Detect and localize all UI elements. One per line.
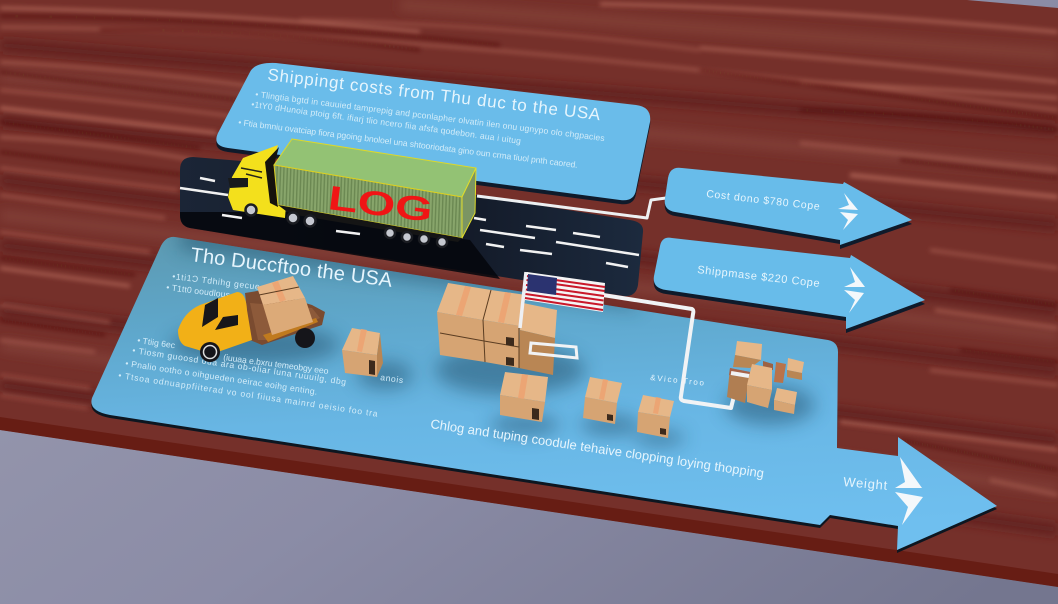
truck with LOG container <box>228 139 476 247</box>
text block: shipping costs bullets <box>238 89 605 170</box>
text block: lower bullets: anois <box>380 372 404 385</box>
small yellow delivery truck <box>178 276 325 362</box>
connector: flag to box cluster <box>603 295 734 408</box>
text block: lower bullets: • Tiosm guoosd oua ara ob-oliar luna ruuuilg, dbg <box>132 345 347 387</box>
icon: stacked boxes <box>437 283 577 375</box>
panel: Thu Duc to the USA <box>91 225 997 553</box>
icon: loose box A <box>500 372 548 422</box>
road <box>180 157 643 296</box>
text block: upper bullets <box>166 271 261 300</box>
truck wheels <box>246 204 447 247</box>
text block: lower bullets: • Ttiig 6ec <box>137 335 176 350</box>
text block: lower bullets <box>118 335 404 419</box>
heading: Thu Duc to the USA: Tho Duccftoo the USA <box>189 244 394 292</box>
icon: loose box B <box>583 377 622 424</box>
icon: box cluster <box>727 341 804 414</box>
road lane markings <box>180 178 639 267</box>
text block: shipping costs bullets: • Tlingtia bgtd in cauuied tamprepig and pconlapher olvatin ilen onu ugnypo olo chgpacies <box>255 89 605 143</box>
connector: truck to first arrow <box>477 196 666 218</box>
label: cost: Cost dono $780 Cope <box>706 188 820 213</box>
text block: upper bullets: •1ti1Ɔ Tdhihg gecue <box>172 271 261 292</box>
icon: single box by truck <box>342 328 383 377</box>
label: weight: Weight <box>843 474 888 493</box>
panel: shipping costs <box>216 63 650 204</box>
label: via free: &Vico Troo <box>650 373 705 388</box>
text block: lower bullets: • Pnalio ootho o oihgueden oeirac eoihg enting. <box>125 358 318 397</box>
heading: shipping costs: Shippingt costs from Thu duc to the USA <box>267 65 602 124</box>
text block: shipping costs bullets: • Ftia bmniu ovatciap fiora pgoing bnoloel una shtooriodata gino oun crma tiuol pnth caored. <box>238 117 578 170</box>
arrow: shipping <box>654 238 925 333</box>
text block: shipping costs bullets: •1tY0 dHunoia ptoig 6ft. ifiarj tlio ncero fiia afsfa qodebon. aua i uitug <box>251 99 522 146</box>
caption: packaging note: Chlog and tuping coodule tehaive clopping loying thopping <box>430 416 765 481</box>
text block: upper bullets: • T1tt0 ooudlous <box>166 282 230 300</box>
arrow: cost <box>665 168 912 249</box>
label: shipping: Shippmase $220 Cope <box>697 264 820 290</box>
text block: lower bullets: • Ttsoa odnuappfiiterad vo ool fiiusa mainrd oeisio foo tra <box>118 370 379 419</box>
icon: loose box C <box>637 395 674 438</box>
icon: chevrons on arrow head <box>895 457 923 525</box>
text block: lower bullets: (iuuaa e.bxru temeobgy eeo <box>223 352 329 376</box>
icon: flag of the USA <box>520 272 605 328</box>
container logo: LOG <box>326 179 435 230</box>
